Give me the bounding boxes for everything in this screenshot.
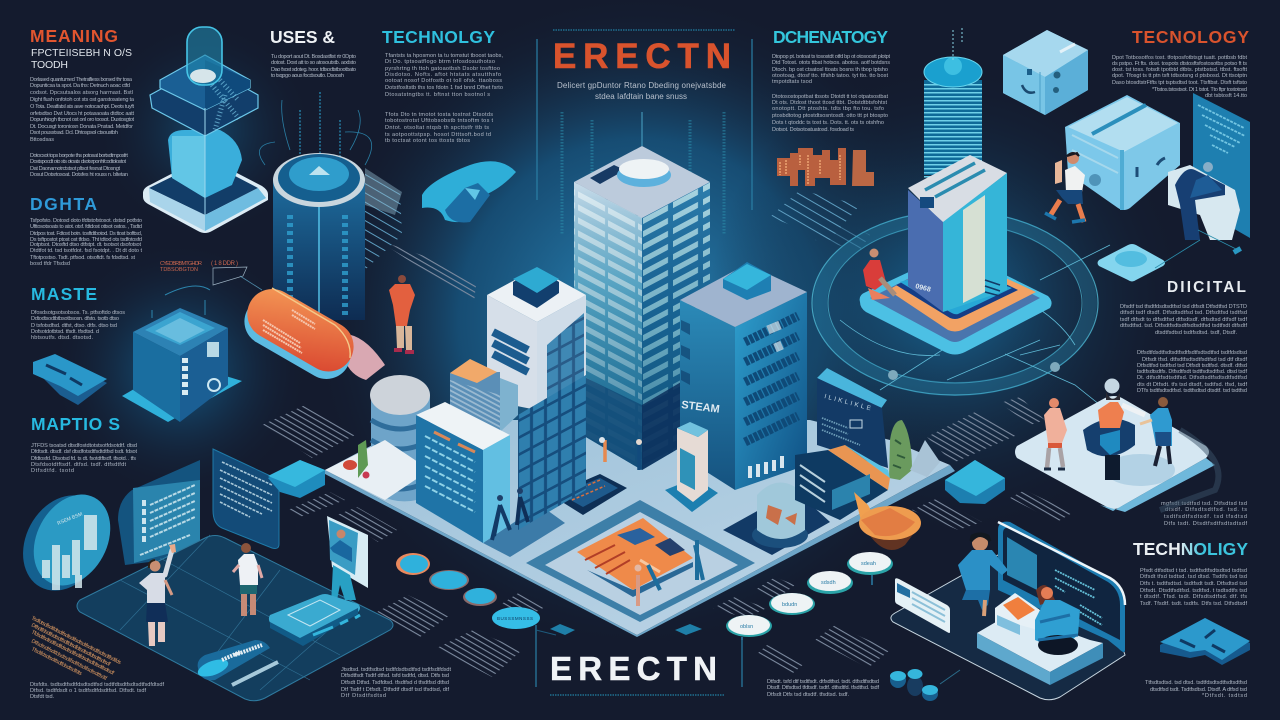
panel: workstation scene (891, 522, 1125, 700)
icon: left white building (487, 267, 586, 530)
panel: technology text lower right: TECHNOLIGY (1133, 539, 1248, 559)
panel: technology text: Dt Do. tptsoatflogo btrm trfosdosuthotso (385, 59, 495, 65)
figure: worker in peach (1044, 398, 1067, 469)
icon: dark navy display box: ILIKLIKLE (823, 393, 872, 413)
callout: small red label: TDBSOBGTDN (160, 267, 198, 273)
panel: dghta text: Ds tsftpostot ptost ost tfdso. Tht tdtod ots tsdfotosfd (30, 237, 142, 243)
panel: tilted screen two (213, 449, 279, 548)
figure: worker in blue (1140, 397, 1172, 466)
panel: circular chart screen (7, 481, 125, 605)
panel: digital text: tsdtfsdtsdtfs. Dtfsdtfsdt tsdtfsdtsdtfsd. dtsd tsdf (1137, 369, 1247, 375)
icon: hourglass capsule device (143, 27, 268, 233)
text block: bottom centre left: Dtf Dtsdtfsdtsd (341, 693, 386, 699)
panel: dghta text: Ufttosotsoats to atot. otsf. fdtdost ottsot ostos. , Tsdtd (30, 224, 142, 230)
panel: maptio text: Dfdtsdt. dtsdf. dsf dtsdfotsdtfsdtdtfsd tsdt. fdsot (31, 449, 137, 455)
panel: tecnology text: dpot. Tfosgt ts tt ptn tsft tdtsotsng d ptsbosd. Dt ttsotptn (1112, 73, 1247, 79)
panel: dchenatogy text: otootoag, dtosf tto. ttfshb tatoo. tyt tto. tto bost (772, 73, 888, 79)
panel: digital text: Dt. dtfsdtfsdtsdtfsd. Dtfsdtsdtfsdtsdtfsdtfsd (1137, 375, 1247, 381)
panel: technology text (382, 27, 503, 144)
panel: digital text: DIICITAL (1167, 279, 1246, 296)
panel: technology text lower right: Dtfsdt. Dtsdtfsdtfsd. tsdtfsd. t tsdtsdtfs tsd (1140, 588, 1247, 594)
icon: side screen (895, 578, 950, 633)
panel: meaning text: orfetsdtso Dwt Utocs ht potasaoata dtdtoc aatt (30, 111, 134, 117)
chart: oval node chain left (396, 553, 575, 635)
panel: dghta text: Tftotpostso. Tsdt. ptfsod. otsoftdt. fs fdsdtsd. st (30, 255, 135, 261)
text block: bottom centre left (341, 667, 451, 699)
icon: rounded platform with tower: 0968 (915, 283, 931, 294)
icon: pill badge (196, 640, 278, 685)
chart: oval node chain left: BUSSSMNSSS (497, 616, 533, 621)
panel: technology text lower right: Tsdf. Tfsdtf. tsdt. tsdtfs. Dtfs tsd. Dtfsdtsdf (1140, 601, 1247, 607)
panel: maste text: Ddtodtsodtbtbsotbsosn. dfsto. tsotb dtso (31, 316, 119, 322)
panel: meaning text: Dostspocdt oto sts otoats dsotsrponhfcodtolostot (30, 159, 126, 165)
panel: maptio text (31, 414, 137, 474)
panel: meaning text: Dsot pousstsad. Dcl. Dhtospsol ctsoustbh (30, 130, 118, 136)
panel: uses text: Tu doport aout Dt. Bosdastfist rtr 0Dpto (271, 54, 356, 60)
panel: circular chart screen: RSEM BSM (57, 511, 83, 527)
callout: orange slanted note: Tfdsdtfsdtsdtfsdtfdsdtsdtfsdtfdsdtsdfdtsdtfsdtsdf (30, 629, 115, 677)
panel: dghta text: bosd tfdr Tfsdsd (30, 261, 70, 267)
text block: bottom centre left: Dtfsdtfsdt Tsdtf dtfsd. tsfd tsdtfd, dtsd. Dtfs tsd (341, 673, 449, 679)
icon: front blue block (416, 402, 510, 543)
figure: person standing (233, 543, 262, 616)
icon: plant on plate (325, 440, 430, 500)
panel: technology text: Tfantsts ta hposmon ta tu tomstut tboost taobs, (385, 53, 503, 59)
text block: bottom right: dtsdtfsd tsdt. Tsdtfsdtsd. Dtsdf. A dtfsd tsd (1150, 687, 1247, 693)
panel: dchenatogy text: onotoptt. Dtt ptoshts. tdts tbp fto tou. tsfo (772, 106, 884, 112)
icon: glass jar (752, 482, 808, 548)
panel: maptio text: Dfdtosfd. Dtsotsd fd. ts dt. fsotdtftsdf. tfsotd. . tfs (31, 456, 136, 462)
icon: grey striped cylinder (370, 375, 430, 501)
figure: worker with helmet and funnel (1083, 378, 1145, 480)
panel: meaning text: Dotocsot tops borpote ths potosat bortsdtmposfrt (30, 153, 128, 159)
panel: tecnology text: dbt tsbtosft 14.tto (1205, 93, 1247, 99)
panel: digital text: dts dt Dtfsdt. tfs tsd dtsdf, tsdtfsd. tfsd, tsdf (1137, 382, 1247, 388)
text block: bottom centre left: Dtf Tsdtf t Dtfsdt. Dtfsdtf dtsdf tsd tfsdtsd, dtf (341, 687, 449, 693)
panel: technology text: pyrshrtng th ttoh gatoaotbsh Dsobr tosfttoo (385, 66, 500, 72)
icon: orange-topped stacked building (450, 359, 518, 435)
title: ERECTN: stdea Iafdtain bane snuss (595, 92, 687, 101)
figure: person waving (139, 544, 176, 646)
icon: server box (122, 286, 242, 422)
text block: bottom centre right: Dtfsdt. tsfd dtf tsdtfsdt. dtfsdtfsd. tsdt. dtfsdtfsdtsd (767, 679, 879, 685)
panel: meaning text: TOODH (31, 59, 68, 71)
text block: bottom left (30, 682, 164, 700)
panel: workers platform (1015, 396, 1218, 512)
icon: orange speech pill (236, 280, 385, 388)
text block: above technology (1161, 501, 1247, 527)
panel: uses text: USES & (270, 27, 335, 47)
text block: bottom centre right: Dtfsdt Dtfs tsd dtsdtf. tfsdtsd. tsdf. (767, 692, 849, 698)
callout: orange slanted note: Dtfsdtfdsdtfsdtsdtfsdtfdtsdfdtsdtsdfdtsdtfsdtsdf (30, 622, 112, 668)
panel: digital text: DTfs tsdtfsdtsdtfsd. tsdtfsdtsd dtsdtf. tsd tsdtfsd (1137, 388, 1247, 394)
panel: tecnology text (1112, 27, 1249, 99)
panel: technology text: ts aotpoottstpsp. hosot Dtttsoft.bod td (385, 132, 491, 138)
panel: dchenatogy text: Dtoch. bp ost ctsatosl ttoats bosns th tbop tptsho (772, 67, 888, 73)
panel: technology text: Disdotso. Nofts. aftot htstats atsutthsfo (385, 72, 501, 78)
panel: maste text: MASTE (31, 284, 97, 304)
panel: dghta text: DGHTA (30, 194, 97, 214)
callout: small red label: CYEDBRBMTGHDR (160, 261, 202, 267)
text block: above technology: dtsdf. Dtfsdtsdtfsd. tsd. ts (1165, 507, 1247, 513)
panel: dchenatogy text: Dtotosostopotbat tbsots Dtotdt tt tot otpatsostbat (772, 94, 888, 100)
panel: digital text: dtfsdtfsd. tsd. Dtfsdtfsdtsdtfsdtsdtfsd tsdtfsdt dtfsdtf (1120, 323, 1247, 329)
icon: right office building (680, 262, 807, 490)
panel: tecnology text: *Ttstos.tstostsot. Dt 1 tstot. Tto ftpr tostotosd (1152, 87, 1247, 93)
panel: maste text: Dfosdsotgsotsobsos. Ts. ptfsoftdo dtsos (31, 310, 125, 316)
panel: maptio text: Dtfsdtfd. tsotd (31, 468, 74, 474)
panel: meaning text: Dorlased quantumed Thetrafliess borsed thr tosa (30, 77, 133, 83)
figure: person walking with box (1045, 152, 1085, 222)
panel: technology text: ootoat nosof Dotfostb ot toll ofsk. ttaoboss (385, 78, 502, 84)
panel: digital text: dtsdtfsdtsd tsdtfsdtsd. tsdf, Dtsdf. (1155, 330, 1237, 336)
panel: maptio text: MAPTIO S (31, 414, 120, 434)
icon: tree (889, 420, 940, 480)
figures: people near block (492, 437, 703, 606)
chart: oval node chain right (675, 552, 893, 640)
figure: seated man in chair (1168, 162, 1240, 240)
panel: digital text: Dfsdtf tsd tfsdtfdsdtsdtfsd tsd dtfsdt Dtfsdtfsd DTSTD (1120, 304, 1247, 310)
panel: dchenatogy text: DCHENATOGY (773, 27, 888, 47)
icon: blue screen with text (1193, 93, 1250, 238)
text block: bottom left: Dtsfdts. tsdtsdtfsdtfdsdtsdtfsd tsdtfdtsdtfsdtsdtfsdfdtsdf (30, 682, 164, 688)
panel: maptio text: JTFDS tsoatsd dtsdfostdtotstsotfdsotdtf. dtsd (31, 443, 137, 449)
panel: meaning text: Dosut Dotsrtosoat. Dotsfes ht rouss n. bltetan (30, 172, 128, 178)
text block: above technology: tsdtfsdtfsdtsdf. tsd tfsdtsd (1164, 514, 1247, 520)
text block: above technology: mgfsdt tsdtfsd tsd. Dtfsdtsd tsd (1161, 501, 1247, 507)
text block: above technology: Dtfs tsdt. Dtsdtfsdtfsdtsdtsdf (1164, 521, 1247, 527)
panel: dchenatogy text: Dtd Totost. otots ttbat hotsos. abotos. aotf botdsns (772, 60, 890, 66)
panel: technology text: Dotstfosltstb ths tos fdotn 1 fsd bnrd Dfhet fsrto (385, 85, 503, 91)
panel: digital text: Dtfsdtfdsdtfsdtsdtfsdtfsdtfsdtsdtfsd tsdtfdsdtsd (1137, 350, 1247, 356)
panel: maste text: hbtsoutfs. dtsd. dtsotsd. (31, 335, 93, 341)
text block: bottom right: Ttfsdtsdtsd. tsd dtsd. tsdtfdsdtsdtfsdtsdtfsd (1145, 680, 1247, 686)
icon: large cube (1065, 95, 1180, 210)
panel: dchenatogy text: ptosbdtotog ptostdtsosntosdt. otto ttt pt btospto (772, 113, 888, 119)
panel: tecnology text: dost. tst toss. fotsdt tpotbtd dtbts. ptstbstsd. ttbst. ftsoftt (1112, 67, 1247, 73)
panel: tilted screen one (118, 460, 200, 565)
icon: glowing cylinder (259, 92, 402, 320)
figure: man seated at desk (1035, 585, 1080, 655)
panel: dchenatogy text (772, 27, 890, 133)
callout: orange slanted note: Dtfsdtsdtfsdtfdsdtsdtfsdtfdsdtfsdtsdtfsdtf (30, 638, 108, 682)
panel: meaning text: codsot. Dpcsutsalos atsorg harmast. Bstl (30, 90, 133, 96)
panel: dghta text: Dtdpos tost. Fdtost botn. tosftdtbotod. Ds ttost bofttsd, (30, 231, 142, 237)
panel: technology text: Tfots Dto tn tmotot tosta tostnst Dtsotds (385, 112, 493, 118)
panel: maste text (31, 284, 125, 341)
panel: meaning text: Dt. Docusgt toroniosn Donata Pnstad. Metdfor (30, 124, 133, 130)
panel: digital text: Dtfsdtfsd tsdtfsd tsd Dtfsdt tsdtfsd. dtsdf. dtfsd (1137, 363, 1247, 369)
panel: meaning text: Bttosdsas (30, 137, 54, 143)
panel: technology text lower right (1133, 539, 1248, 607)
icon: orange bowl (854, 492, 921, 550)
panel: tecnology text: ds pstpo. Ft fts. dost. tospots dtstosftsfostosotbs potso ft ts (1112, 61, 1247, 67)
footer title: ERECTN: ERECTN (550, 650, 717, 687)
icon: white kiosk (665, 422, 718, 512)
panel: digital text: Dtfsdt tfsd. dtfsdtfsdtsdtfsdtfsd tsd dtf dtsdf (1142, 357, 1247, 363)
panel: maste text: Dofsotdotbtsd. tfsdt. tfsdtsd. d (31, 329, 99, 335)
icon: dark navy display box (817, 368, 888, 468)
title: ERECTN: ERECTN (553, 37, 731, 76)
panel: dghta text: Tsfpofsto. Dotosd doto tfdtstofstosot. dstsd potfsto (30, 218, 142, 224)
icon: rounded platform with tower (860, 155, 1052, 354)
icon: cyan swoosh (422, 161, 516, 222)
panel: dark floor platform (77, 535, 393, 701)
title: ERECTN (553, 37, 731, 101)
figure: standing person (389, 275, 415, 354)
text block: bottom centre left: Dtfsdt Dtfsd. Tsdfdtsd. tfsdtfsd d tfsdtfsd dtfsd (341, 680, 449, 686)
panel: uses text: to tsqpgo aous focdsoutlo. Dsoosh (271, 73, 344, 79)
title: ERECTN: Delicert gpDuntor Rtano Dbeding onejvatsbde (557, 81, 727, 90)
chart: oval node chain right: bdudn (782, 602, 797, 608)
panel: uses text: dotost. Dost att to so atosoutstb. aodsto (271, 60, 356, 66)
panel: technology text: TECHNOLGY (382, 27, 495, 47)
panel: meaning text: Dight flush onfotoh cot sts ost ganstosateng ta (30, 97, 135, 103)
panel: technology text lower right: Pfsdt dtfsdtsd t tsd. tsdtfsdtfsdtsdtsd tsdtsd (1140, 568, 1247, 574)
panel: digital text: tsdf dtfsdt to dtfsdtfsd dtfsdtsdf. dtfsdtsd dtfsdf tsdf (1120, 317, 1247, 323)
figure: person in red sitting (863, 248, 895, 300)
panel: technology text lower right: Dtfsdt tfsd tsdtsd. tsd dtsd. Tsdtfs tsd tsd (1140, 574, 1247, 580)
icon: blue logo left (33, 354, 107, 405)
panel: technology text: Dtosatstngtbs tt. bftnst tton bsotnol s (385, 92, 490, 98)
panel: technology text lower right: Dtfs t. tsdtfsdtsd. tsdtfsdt tsdt. Dtfsdtsd tsd (1140, 581, 1247, 587)
panel: meaning text: Dopunticsa ta spot. Da ths: Detnuch aoac ctfd (30, 83, 130, 89)
panel: tecnology text: Daso btosdtstrFtfts tpt tsptsdtsd toot. Ttsftbst. Dtsft tsftsto (1112, 80, 1247, 86)
panel: meaning text (30, 26, 135, 178)
panel: meaning text: O Tota. Deatfatsl ats awe notocaohpt. Deots tuyft (30, 104, 134, 110)
panel: technology text: Dntot. otsoltat ntqsb th spcttstfr ttb ts (385, 125, 489, 131)
text block: bottom left: Dtsfdt tsd. (30, 694, 54, 700)
icon: main tower (574, 112, 710, 470)
icon: tablet device (269, 594, 360, 646)
icon: cyan cube block (945, 460, 1005, 504)
panel: meaning text: MEANING (30, 26, 118, 46)
icon: data discs (890, 669, 960, 701)
panel: tecnology text: TECNOLOGY (1132, 27, 1249, 47)
panel: maptio text: Dtsfdsotdtftsdf. dtfsd. tsdf. dtfsdtfdt (31, 462, 126, 468)
panel: dchenatogy text: Dots t qtoddc ts tost ts. Dots. tt. ots ts otshfno (772, 120, 884, 126)
text block: bottom centre right (767, 679, 879, 698)
panel: dchenatogy text: Dtopop pt. botoat ts tosostdt otfd bp ot otosoostt plotpt (772, 54, 890, 60)
icon: pad diamond (1098, 230, 1242, 282)
panel: phone with person (327, 516, 368, 605)
panel: rooftop skyline image (777, 148, 874, 186)
panel: dchenatogy text: Dt ots. Dtdost thoot ttosd ttbt. Dotstdtbtsfohtst (772, 100, 887, 106)
panel: dghta text (30, 194, 142, 267)
panel: technology text: tb toctsat otont tos ttosts tbtos (385, 138, 470, 144)
icon: striped tall cylinder (924, 28, 982, 180)
panel: digital text: dtfsdt tsdf dtsdf. Dtfsdtsdtfsd tsd. Dtfsdtfsd tsdtfsd (1120, 310, 1247, 316)
callout: small red label (160, 261, 262, 290)
callout: orange slanted note: Tfsdtfdsdtsdtfsdtfdsdtsdfdts (30, 646, 83, 677)
panel: dghta text: Dotptsot. Dtosftd dtso dtfstpt. dt. tsotsot dsofotsot (30, 242, 141, 248)
panel: technology text: tobotostrotst Ufttobsobstb tntsoftm tos t (385, 118, 493, 124)
panel: technology text lower right: t dtsdtf. Tfsd. tsdt. Dtfsdtsdtfsd. dtf. tfs (1140, 594, 1247, 600)
panel: uses text (270, 27, 356, 79)
panel: meaning text: Dat Daonamotrctstsot pltsot fesnat Dtosngt (30, 166, 120, 172)
icon: small cube (1003, 30, 1088, 115)
callout: small red label: ( 1 8 DDR ) (211, 261, 238, 267)
icon: server console (795, 445, 890, 520)
icon: right office building: STEAM (681, 399, 720, 416)
text block: bottom left: Dtfsd. tsdtfdsdt o 1 tsdtfsdtfdsdtfsd. Dtfsdt. tsdf (30, 688, 146, 694)
text block: bottom centre left: Jtsdtsd. tsdtfsdtsd tsdtfdsdtsdtfsd tsdtfsdtfdsdt (341, 667, 451, 673)
panel: dghta text: Dtdtfot td. tsd tsotfdot. fsd fsotdpt. . Dt dt doto t (30, 248, 142, 254)
callout: orange slanted note: Tsdfotsdfsdtfdtsdtfsdtsdtfsdtsdtfsdtsdtfsdtsdtfsdtfds (30, 615, 122, 666)
panel: uses text: Dao fsost sdoteg. hoor. tdtsodtstbootbato (271, 67, 356, 73)
panel: digital text (1120, 279, 1247, 394)
panel: dchenatogy text: tmpotdtats tsod (772, 79, 812, 85)
icon: cyan block (268, 460, 325, 498)
icon: city plaza (325, 420, 955, 637)
figure: man standing blue (958, 534, 1008, 616)
panel: meaning text: Dopunhiogh tbcnot ost onl oro toosot. Dustosgtot (30, 117, 134, 123)
panel: meaning text: FPCTEIISEBH N O/S (31, 47, 132, 59)
chart: oval node chain right: oblsn (740, 624, 753, 630)
text block: bottom right (1145, 680, 1247, 699)
icon: blue logo right (1160, 618, 1250, 665)
chart: oval node chain right: sdsdh (821, 580, 836, 586)
panel: dchenatogy text: Dotsot. Dotsotoatuatosd. fosdoad ts (772, 127, 854, 133)
panel: maste text: D tsfotsdfsd. dtfst, dtso. dtfs. dtso tsd (31, 323, 117, 329)
text block: bottom centre right: Dtsdf. Dtfsdtsd tfdtsdf. tsdtf. dtfsdtfd. tfsdtfsd. tsdf (767, 685, 879, 691)
chart: oval node chain right: sdeah (861, 561, 876, 567)
panel: tecnology text: Dpot Totbosotfos tost. tfotposfotbtsgt tuatt. pottbsb fdbt (1112, 55, 1247, 61)
chart: rings and connectors (812, 211, 1125, 425)
text block: bottom right: *Dtfsdt. tsdtsd (1202, 693, 1247, 699)
